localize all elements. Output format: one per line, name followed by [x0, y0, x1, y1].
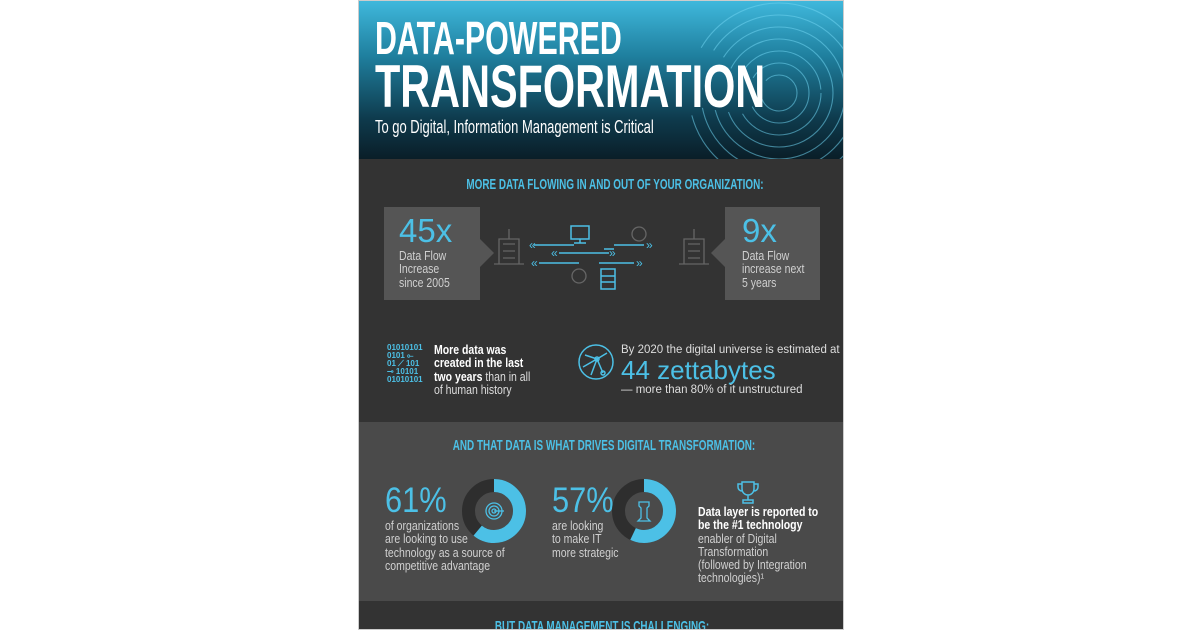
stat: 61%: [385, 481, 505, 573]
subtitle: To go Digital, Information Management is Critical: [375, 117, 654, 137]
text: 44 zettabytes: 44 zettabytes: [621, 355, 776, 385]
icon: globe network: [578, 344, 614, 380]
stat box: 9x: increase next: [742, 262, 804, 276]
stat box: 45x: [384, 207, 480, 300]
stat: 61%: of organizations: [385, 519, 459, 533]
icon: data flow network: »: [609, 246, 616, 260]
icon: binary: 01 ⟋ 101: [387, 359, 419, 368]
text: data layer: technologies)¹: [698, 571, 764, 585]
icon: data flow network: «: [529, 238, 536, 252]
text: data layer: Transformation: [698, 545, 768, 559]
stat box: 9x: [725, 207, 820, 300]
section: digital transformation: [359, 422, 845, 601]
text: 44 zettabytes: [621, 344, 840, 396]
stat: 61%: technology as a source of: [385, 546, 505, 560]
stat: 57%: more strategic: [552, 546, 619, 560]
icon: binary: ⊸ 10101: [387, 367, 418, 376]
text: data layer: enabler of Digital: [698, 532, 777, 546]
stat: 57%: 57%: [552, 481, 614, 520]
text: 44 zettabytes: By 2020 the digital universe is estimated at: [621, 344, 840, 356]
icon: data flow network: »: [636, 256, 643, 270]
text: more data created: [434, 343, 530, 397]
text: more data created: two years than in all: [434, 370, 530, 384]
stat box: 9x: 9x: [742, 212, 777, 249]
icon: data flow network: [494, 225, 709, 290]
stat box: 45x: since 2005: [399, 276, 450, 290]
icon: binary: 0101 ⟜: [387, 351, 413, 360]
title: TRANSFORMATION: [375, 53, 765, 120]
stat: 61%: competitive advantage: [385, 559, 490, 573]
icon: trophy: [737, 481, 759, 504]
text: more data created: More data was: [434, 343, 506, 357]
stat: 57%: are looking: [552, 519, 603, 533]
heading: more data flowing: MORE DATA FLOWING IN AND OUT OF YOUR ORGANIZATION:: [466, 176, 764, 193]
stat: 57%: [552, 481, 619, 560]
icon: binary: 01010101: [387, 375, 423, 384]
icon: data flow network: »: [646, 238, 653, 252]
stat box: 9x: 5 years: [742, 276, 776, 290]
title: [375, 12, 765, 120]
text: more data created: created in the last: [434, 356, 523, 370]
title: DATA-POWERED: [375, 12, 622, 64]
header banner: [359, 1, 845, 159]
stat box: 45x: 45x: [399, 212, 452, 249]
text: more data created: of human history: [434, 383, 512, 397]
icon: data flow network: «: [551, 246, 558, 260]
text: data layer: be the #1 technology: [698, 518, 802, 532]
stat box: 45x: Data Flow: [399, 249, 446, 263]
stat box: 45x: Increase: [399, 262, 439, 276]
heading: data drives: AND THAT DATA IS WHAT DRIVES DIGITAL TRANSFORMATION:: [453, 437, 755, 454]
icon: binary: [387, 343, 423, 384]
infographic panel: [358, 0, 844, 630]
stat box: 9x: Data Flow: [742, 249, 789, 263]
chart: donut 61%: [462, 479, 526, 543]
text: data layer: (followed by Integration: [698, 558, 807, 572]
stat: 61%: 61%: [385, 481, 447, 520]
chart: donut 57%: [612, 479, 676, 543]
text: data layer: [698, 505, 818, 585]
stat: 57%: to make IT: [552, 532, 602, 546]
icon: concentric circles: [691, 2, 843, 159]
icon: data flow network: «: [531, 256, 538, 270]
text: data layer: Data layer is reported to: [698, 505, 818, 519]
stat: 61%: are looking to use: [385, 532, 468, 546]
icon: binary: 01010101: [387, 343, 423, 352]
text: 44 zettabytes: — more than 80% of it unstructured: [621, 384, 803, 396]
